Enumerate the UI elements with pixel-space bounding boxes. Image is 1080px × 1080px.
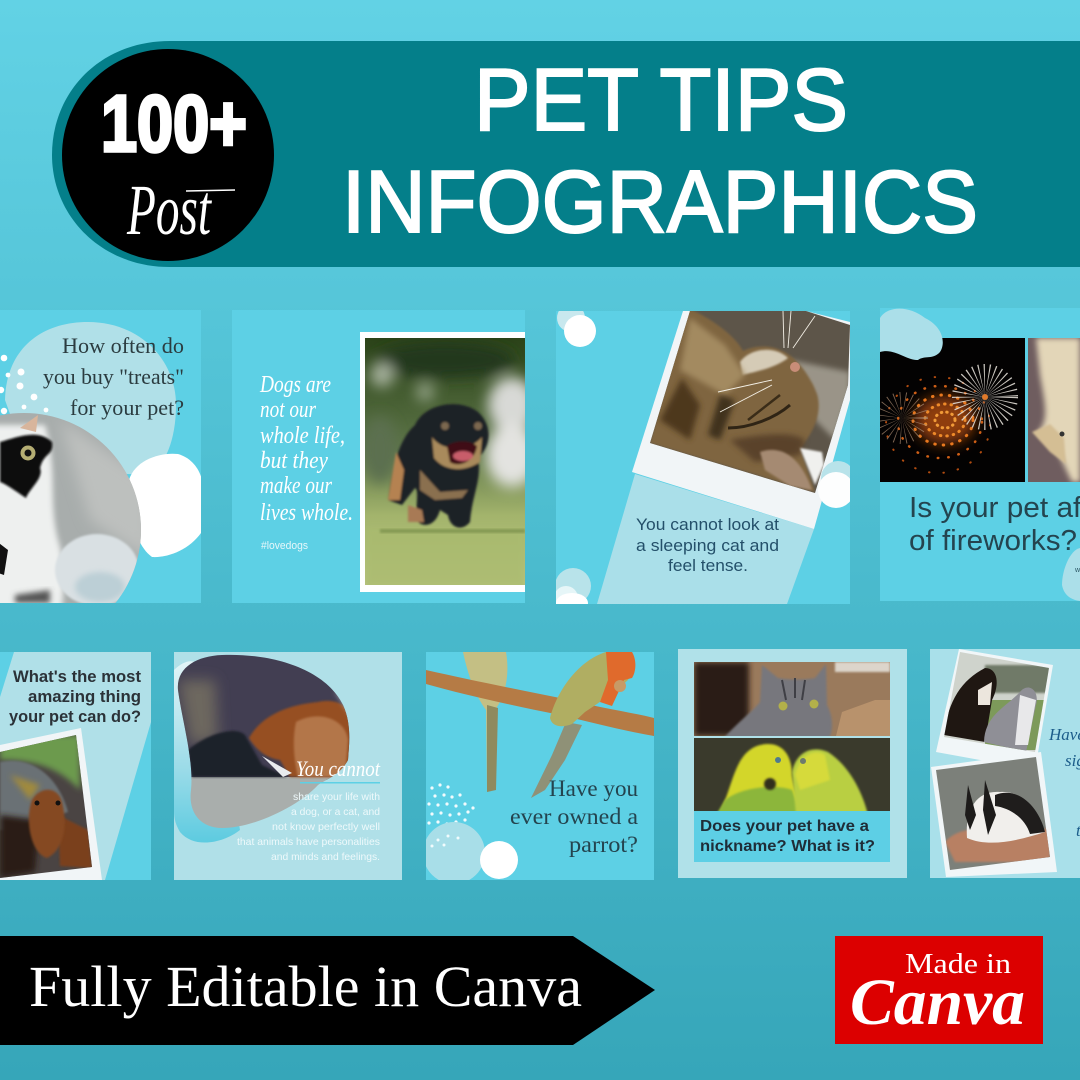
caption text <box>700 818 875 855</box>
banner text: Fully Editable in Canva <box>29 954 582 1019</box>
question text: of fireworks? <box>909 525 1077 557</box>
panel: sleeping cat post <box>554 304 855 613</box>
post script text <box>1048 725 1080 840</box>
caption text: Does your pet have a <box>700 818 869 835</box>
quote text: not know perfectly well <box>272 821 380 833</box>
quote text: that animals have personalities <box>237 836 380 848</box>
title <box>342 50 978 251</box>
decorative blobs <box>554 304 855 613</box>
caption text: feel tense. <box>668 556 748 575</box>
quote text: and minds and feelings. <box>271 851 380 863</box>
panel: treats post <box>0 310 203 610</box>
illustration: parrots on branch <box>426 652 654 798</box>
photo: cat on ground <box>1028 338 1080 482</box>
dot cluster <box>427 783 475 826</box>
quote text <box>259 372 353 526</box>
made in Canva badge <box>835 936 1043 1044</box>
photo: cat in circle <box>0 413 141 603</box>
question text: ever owned a <box>510 804 638 829</box>
question text <box>910 496 1080 550</box>
badge: 100+ Post: 100+ <box>101 79 247 168</box>
photo: sleeping cat <box>650 311 850 493</box>
banner band <box>52 41 1080 267</box>
corner blob <box>880 309 943 360</box>
quote text: not our <box>260 397 317 423</box>
corner blob bottom right <box>1062 548 1080 601</box>
quote text <box>237 756 381 863</box>
badge: 100+ Post: Post <box>126 170 212 250</box>
panel: parrot post <box>423 652 654 884</box>
banner arrow <box>0 936 655 1045</box>
question text: amazing thing <box>28 688 141 706</box>
question text: What's the most <box>13 668 142 686</box>
polaroid frame <box>632 311 850 529</box>
photo: turtle <box>0 730 95 880</box>
badge: 100+ Post <box>62 49 274 261</box>
title: INFOGRAPHICS <box>342 152 978 251</box>
question text: How often do <box>62 333 184 358</box>
dog <box>388 404 488 528</box>
photo frame <box>360 332 525 592</box>
question text: Have you <box>549 776 638 801</box>
panel: dogs quote post <box>232 310 538 603</box>
quote text: make our <box>260 473 333 499</box>
quote text: lives whole. <box>260 500 353 526</box>
quote text: a dog, or a cat, and <box>291 806 380 818</box>
made in Canva badge: Canva <box>850 966 1025 1039</box>
caption box <box>694 811 890 862</box>
question text: parrot? <box>569 832 638 857</box>
light band <box>597 474 814 604</box>
photo: fireworks <box>880 338 1025 482</box>
question text <box>510 776 638 857</box>
title: PET TIPS <box>474 50 848 149</box>
caption text: a sleeping cat and <box>636 536 779 555</box>
photo: dog and cat <box>178 654 350 828</box>
question text: your pet can do? <box>9 708 141 726</box>
panel: nickname post <box>678 649 907 878</box>
panel: fireworks post <box>880 308 1080 601</box>
question text: you buy "treats" <box>43 364 184 389</box>
polaroid: dogs <box>936 649 1055 770</box>
polaroid: rabbit <box>931 752 1057 877</box>
hashtag: #lovedogs <box>261 540 308 552</box>
polaroid frame <box>0 728 102 880</box>
photo: budgerigars <box>694 738 890 815</box>
quote text: share your life with <box>293 791 380 803</box>
photo: running dog <box>365 338 525 585</box>
caption text <box>636 518 779 571</box>
question text: for your pet? <box>70 395 184 420</box>
panel: polaroids post <box>930 649 1080 878</box>
caption text: nickname? What is it? <box>700 838 875 855</box>
header banner <box>52 41 1080 267</box>
made in Canva badge: Made in <box>905 949 1011 980</box>
quote text: You cannot <box>296 756 381 781</box>
quote text: whole life, <box>260 423 345 449</box>
quote text: but they <box>260 448 328 474</box>
gradient blob behind photo <box>174 661 240 843</box>
circles <box>423 822 518 884</box>
photo: tabby cat in box <box>694 662 890 740</box>
small text: w <box>1074 567 1080 574</box>
caption text: You cannot look at <box>636 515 779 534</box>
panel: turtle post <box>0 652 151 880</box>
quote text: Dogs are <box>259 372 331 398</box>
panel: dog and cat quote post <box>170 650 402 880</box>
question text <box>9 668 142 726</box>
question text <box>43 333 184 420</box>
